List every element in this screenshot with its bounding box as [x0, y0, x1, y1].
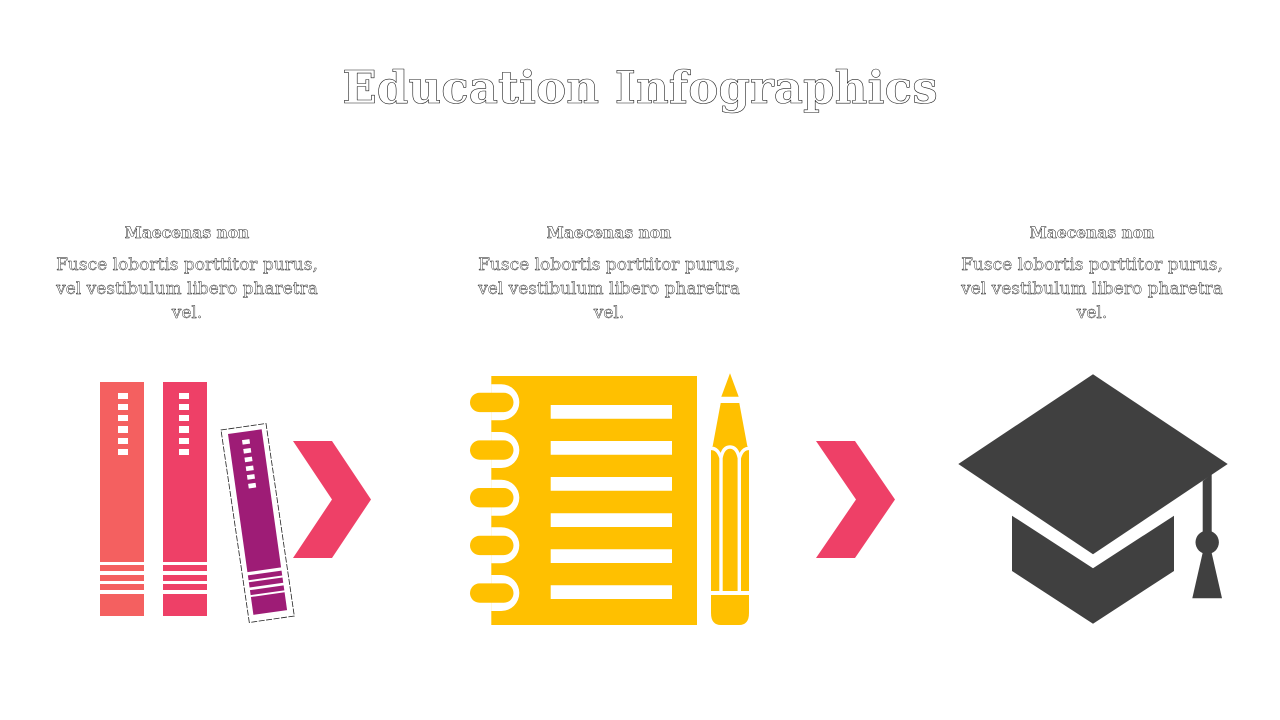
arrow: first chevron: [293, 441, 371, 558]
notebook spiral rings: [470, 384, 519, 611]
description: column 3: vel vestibulum libero pharetra: [960, 279, 1223, 299]
icon: notebook: [470, 376, 697, 625]
description: column 1: vel vestibulum libero pharetra: [55, 279, 318, 299]
text block: column 3: [960, 223, 1223, 323]
description: column 2: [477, 255, 740, 323]
cap base: [1012, 516, 1174, 624]
description: column 1: Fusce lobortis porttitor purus,: [56, 255, 318, 275]
description: column 3: Fusce lobortis porttitor purus,: [961, 255, 1223, 275]
heading: column 2: Maecenas non: [547, 223, 671, 242]
icon: pink book: [163, 382, 207, 616]
description: column 3: [960, 255, 1223, 323]
heading: column 1: Maecenas non: [125, 223, 249, 242]
icon: pencil: [708, 373, 752, 625]
icon: graduation cap: [958, 374, 1228, 624]
heading: column 3: Maecenas non: [1030, 223, 1154, 242]
arrow: second chevron: [816, 441, 895, 558]
description: column 2: vel vestibulum libero pharetra: [477, 279, 740, 299]
title: Education Infographics: [342, 61, 938, 114]
description: column 2: Fusce lobortis porttitor purus,: [478, 255, 740, 275]
notebook lines: [551, 405, 672, 599]
text block: column 2: [477, 223, 740, 323]
icon: tilted purple book: [221, 424, 294, 622]
icon: coral book: [100, 382, 144, 616]
description: column 1: vel.: [171, 303, 202, 323]
icon: books: [100, 373, 1228, 625]
description: column 3: vel.: [1076, 303, 1107, 323]
tassel: [1192, 474, 1222, 598]
description: column 2: vel.: [593, 303, 624, 323]
notebook page: [491, 376, 697, 625]
description: column 1: [55, 255, 318, 323]
cap board: [958, 374, 1228, 554]
text block: column 1: [55, 223, 318, 323]
